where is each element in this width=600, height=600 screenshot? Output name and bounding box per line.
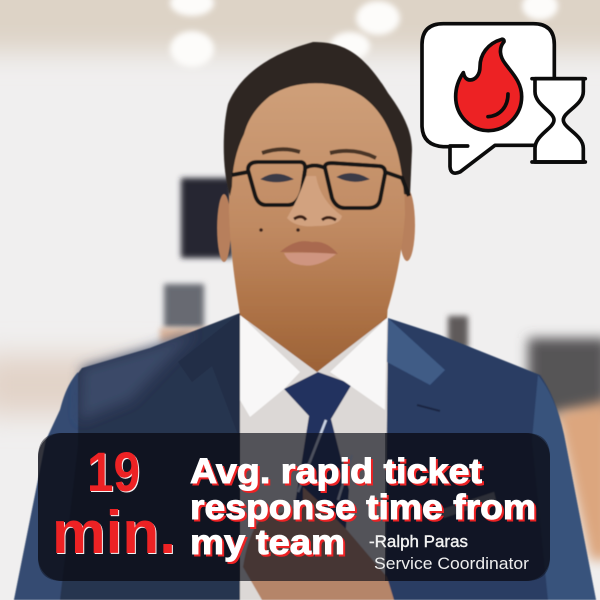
caption: 19 min.: min. xyxy=(53,500,177,567)
attribution: name: -Ralph Paras xyxy=(369,532,468,551)
icon: hourglass xyxy=(535,79,583,162)
moles xyxy=(261,228,298,232)
attribution: role: Service Coordinator xyxy=(374,554,529,573)
icon: flame speech bubble with hourglass xyxy=(422,24,585,173)
right jacket side xyxy=(384,318,596,600)
icon: flame xyxy=(456,39,522,131)
shirt xyxy=(240,322,388,600)
hourglass caps xyxy=(532,79,585,162)
tie stripes xyxy=(298,420,352,500)
collar xyxy=(240,315,387,417)
glasses xyxy=(232,162,409,208)
bubble tail notch xyxy=(450,140,468,151)
face xyxy=(229,82,405,372)
left lapel xyxy=(178,313,240,440)
right lapel xyxy=(387,318,445,385)
jacket pocket slit xyxy=(417,405,440,411)
caption: average response time statement: response time from xyxy=(192,490,538,529)
suit jacket left side xyxy=(14,313,245,600)
caption: average response time statement: response time from xyxy=(190,488,536,527)
caption: average response time statement: my team xyxy=(190,523,345,562)
eyebrows xyxy=(262,149,376,158)
caption: 19 min. xyxy=(52,440,177,567)
caption: 19 min.: min. xyxy=(52,499,176,566)
left sleeve xyxy=(14,372,78,600)
pocket square xyxy=(440,492,496,518)
caption: average response time statement: Avg. rapid ticket xyxy=(192,454,484,493)
right sleeve xyxy=(532,375,596,600)
caption: 19 min.: 19 xyxy=(87,440,140,503)
icon: speech bubble xyxy=(422,24,554,173)
left shoulder highlight xyxy=(80,332,195,420)
tie xyxy=(284,372,352,540)
caption: average response time statement: Avg. rapid ticket xyxy=(190,452,482,491)
hand xyxy=(243,487,394,600)
dark translucent caption panel xyxy=(38,433,550,581)
eyes xyxy=(262,174,368,182)
mouth xyxy=(280,241,338,254)
caption: 19 min.: 19 xyxy=(88,441,141,504)
extra darkening over jacket areas xyxy=(38,433,550,581)
ears xyxy=(217,194,231,262)
flame highlight xyxy=(488,94,508,117)
nose xyxy=(287,176,342,226)
neck and jaw xyxy=(238,270,390,372)
caption: average response time statement xyxy=(190,452,538,564)
hair xyxy=(224,42,412,196)
caption: average response time statement: my team xyxy=(192,525,347,564)
